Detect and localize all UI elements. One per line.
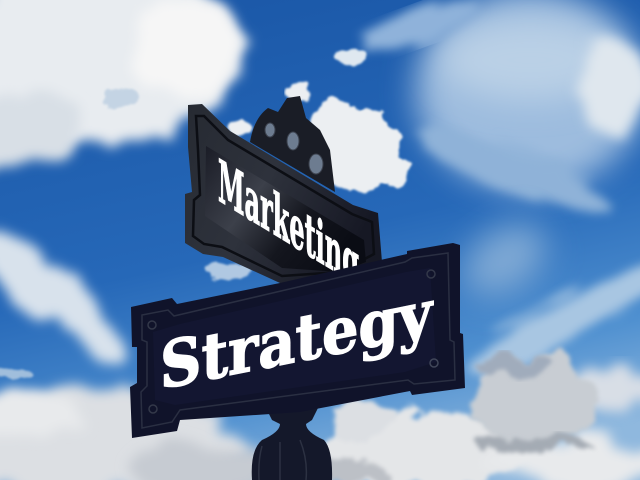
ornament above marketing sign — [250, 96, 335, 192]
cloud bank: bottom — [0, 356, 640, 480]
cloud: center behind sign — [230, 83, 409, 192]
street sign scene: Marketing — [218, 146, 359, 300]
sign: Strategy — [130, 243, 465, 438]
cloud: top left — [0, 0, 245, 170]
label: Strategy: Strategy — [160, 275, 434, 405]
cloud: top right streaks — [335, 0, 640, 391]
cloud: left streak — [0, 213, 252, 378]
lamp post — [252, 408, 332, 480]
sign: Marketing — [185, 104, 382, 300]
